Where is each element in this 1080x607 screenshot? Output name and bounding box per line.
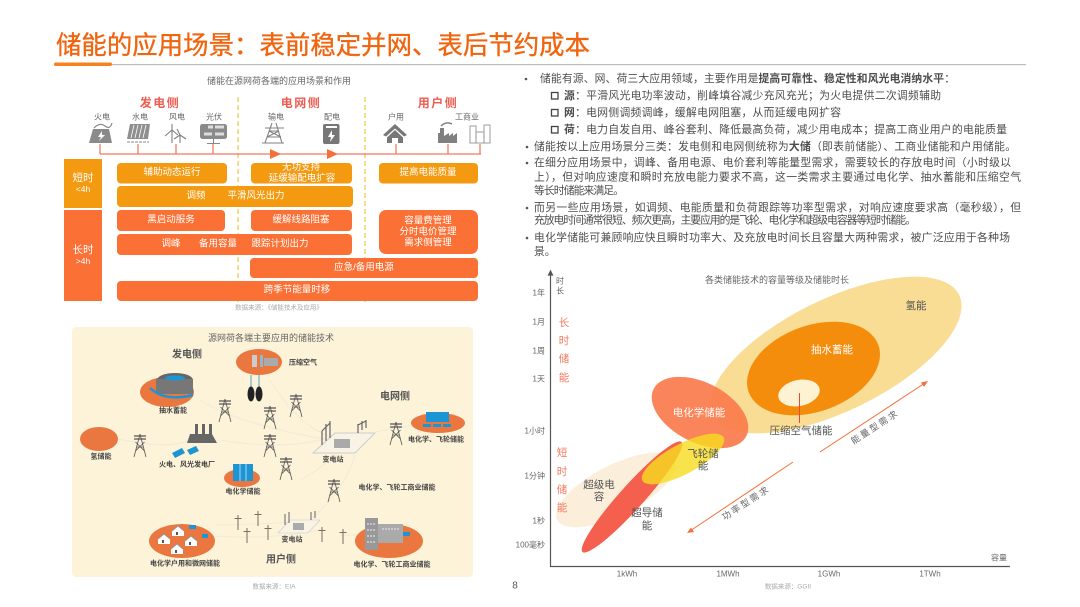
industrial label: 电化学、飞轮工商业储能 <box>358 482 436 492</box>
long duration label: 储 <box>559 352 570 365</box>
chart heading: 各类储能技术的容量等级及储能时长 <box>705 274 849 285</box>
icon: thermal power <box>89 123 112 143</box>
long duration label <box>559 317 570 384</box>
grid-side storage: 电化学、飞轮储能 <box>408 434 464 444</box>
side headings: 电网侧 <box>380 390 410 402</box>
grid-side storage <box>408 412 465 444</box>
ellipse labels <box>583 406 726 532</box>
distribution poles <box>234 511 346 544</box>
text block: key points: 充放电时间通常很短、频次更高，主要应用的是飞轮、电化学和超级电容器等短时储能。 <box>534 212 916 226</box>
short duration label: 能 <box>557 501 568 514</box>
electrochemical storage: 电化学储能 <box>226 486 260 496</box>
ellipse: hydrogen <box>688 245 984 465</box>
ellipse: compressed air <box>770 376 833 437</box>
text block: key points: 荷：电力自发自用、峰谷套利、降低最高负荷，减少用电成本；提高工商业用户的电能质量 <box>564 122 1007 136</box>
arrow: power demand <box>687 462 793 533</box>
y axis labels: 1月 <box>533 318 545 326</box>
arrow: energy demand: 能量型需求 <box>849 407 901 446</box>
ellipse labels: 容 <box>594 490 605 503</box>
residential storage <box>149 524 220 568</box>
x axis labels: 1kWh <box>617 570 637 578</box>
side headings: 用户侧 <box>266 552 296 566</box>
faint grid wires <box>118 380 420 537</box>
chart: capacity vs duration <box>516 245 1010 590</box>
substation <box>313 420 375 464</box>
short duration bar text: 无功支持 <box>282 161 320 173</box>
icon labels: 工商业 <box>455 112 479 122</box>
text block: key points: 而另一些应用场景，如调频、电能质量和负荷跟踪等功率型需求，对响应速度要求高（毫秒级），但 <box>534 200 1021 214</box>
y axis title: 时 <box>556 276 564 286</box>
icon: distribution box <box>323 124 340 144</box>
row label: short duration: <4h <box>76 184 90 194</box>
text block: key points: 等长时储能来满足。 <box>534 183 624 197</box>
y axis labels: 100毫秒 <box>516 540 545 550</box>
ellipse: compressed air: 压缩空气储能 <box>770 424 833 437</box>
user substation: 变电站 <box>282 534 302 544</box>
text block: key points: 电化学储能可兼顾响应快且瞬时功率大、及充放电时间长且容量大两种需求，被广泛应用于各种场 <box>534 230 1010 244</box>
short duration bars <box>117 163 478 207</box>
ellipse: pumped hydro: 抽水蓄能 <box>811 343 853 356</box>
commercial storage: 电化学、飞轮工商业储能 <box>354 560 430 568</box>
sub-bullet squares <box>552 92 558 133</box>
icon: commercial buildings <box>470 125 490 143</box>
long duration bar text: 缓解线路阻塞 <box>272 214 330 226</box>
y axis labels: 1年 <box>533 288 545 298</box>
y axis title <box>556 276 564 296</box>
icon labels: 配电 <box>324 112 340 122</box>
ellipse labels: 能 <box>698 459 709 472</box>
matrix heading: 储能在源网荷各端的应用场景和作用 <box>207 75 351 86</box>
short duration label: 储 <box>557 483 568 496</box>
timeline axis with arrows <box>100 144 481 159</box>
icon labels <box>94 112 479 122</box>
ellipse: supercapacitor <box>546 438 686 542</box>
compressed air <box>236 349 317 402</box>
ellipse labels: 超导储 <box>631 506 663 519</box>
map source: 数据来源：EIA <box>253 582 296 590</box>
icon: transmission tower <box>262 123 284 143</box>
pumped hydro: 抽水蓄能 <box>159 406 187 414</box>
arrow: energy demand <box>820 381 928 452</box>
long duration bar text: 分时电价管理 <box>399 226 457 238</box>
icon: house <box>383 124 407 143</box>
side headings: 发电侧 <box>172 348 202 360</box>
substation: 变电站 <box>322 454 344 464</box>
hydrogen storage: 氢储能 <box>90 452 112 460</box>
long duration bar text: 需求侧管理 <box>404 236 452 248</box>
map background <box>72 327 473 577</box>
text block: key points: 景。 <box>534 245 556 258</box>
short duration label <box>557 446 568 514</box>
row label: long duration <box>64 210 102 301</box>
hydrogen storage <box>80 427 118 460</box>
matrix source: 数据来源：《储能技术及应用》 <box>235 302 323 312</box>
short duration bar text: 提高电能质量 <box>399 166 457 178</box>
ellipse labels: 超级电 <box>583 478 615 491</box>
icon labels: 火电 <box>94 112 110 122</box>
short duration label: 时 <box>557 466 568 478</box>
icon labels: 输电 <box>268 112 284 122</box>
axes <box>548 271 1010 566</box>
x axis labels: 1MWh <box>716 570 740 578</box>
panel: source-grid-load scenario matrix <box>64 75 490 312</box>
long duration bar text: 黑启动服务 <box>147 214 195 226</box>
short duration bar text <box>143 161 457 202</box>
arrow: power demand: 功率型需求 <box>720 483 772 522</box>
side headings <box>172 348 410 566</box>
icon labels: 光伏 <box>206 112 222 122</box>
row label: long duration: 长时 <box>72 244 94 256</box>
row label: short duration: 短时 <box>72 171 94 184</box>
text block: key points: 源：平滑风光电功率波动，削峰填谷减少充风充光；为火电提供二次调频辅助 <box>564 88 941 102</box>
long duration bar text <box>147 214 457 296</box>
column headings: 发电侧 <box>140 95 180 110</box>
icon: hydro power <box>127 124 150 142</box>
title rule <box>54 62 1026 66</box>
long duration label: 时 <box>559 335 570 347</box>
power plant: 火电、风光发电厂 <box>159 460 215 468</box>
long duration bar text: 跨季节能量时移 <box>264 284 331 296</box>
long duration bar text: 备用容量 <box>199 238 237 250</box>
y axis labels: 1秒 <box>533 516 545 526</box>
ellipse labels: 飞轮储 <box>687 447 719 460</box>
y axis labels: 1天 <box>533 374 545 384</box>
column divider lines <box>238 97 365 305</box>
short duration bar text: 延缓输配电扩容 <box>269 172 336 184</box>
page number: 8 <box>512 580 518 592</box>
x axis labels: 容量 <box>991 552 1007 562</box>
long duration bar text: 容量费管理 <box>404 214 452 226</box>
long duration bars <box>117 210 478 301</box>
ellipse: hydrogen: 氢能 <box>906 299 927 312</box>
ellipse labels: 电化学储能 <box>673 406 726 419</box>
short duration bar text: 辅助动态运行 <box>143 166 201 178</box>
panel: storage map <box>72 327 473 590</box>
short duration bar text: 调频 <box>186 190 206 202</box>
electrochemical storage <box>224 464 260 496</box>
commercial storage <box>354 518 430 568</box>
row label: long duration: >4h <box>76 256 90 266</box>
column headings <box>140 95 458 110</box>
text block: key points: 储能按以上应用场景分三类：发电侧和电网侧统称为大储（即表前储能）、工商业储能和户用储能。 <box>534 139 1016 153</box>
long duration bar text: 应急/备用电源 <box>334 261 394 273</box>
ellipse: flywheel <box>635 424 731 494</box>
y axis labels: 1小时 <box>525 426 545 436</box>
ellipse labels: 能 <box>642 519 653 532</box>
text block: key points: 上），但对响应速度和瞬时充放电能力要求不高，这一类需求主要通过电化学、抽水蓄能和压缩空气 <box>534 170 1021 184</box>
long duration bar text: 跟踪计划出力 <box>251 238 309 250</box>
title: 储能的应用场景：表前稳定并网、表后节约成本 <box>56 32 590 60</box>
text block: key points: 在细分应用场景中，调峰、备用电源、电价套利等能量型需求，需要较长的存放电时间（小时级以 <box>534 155 1011 169</box>
short duration bar text: 平滑风光出力 <box>227 190 285 202</box>
icon labels: 风电 <box>169 112 185 122</box>
ellipse: superconducting <box>574 434 690 560</box>
icon: wind power <box>165 124 186 143</box>
icon: solar panel <box>200 124 227 144</box>
y axis title: 长 <box>556 286 564 296</box>
user substation <box>278 511 320 544</box>
text block: key points <box>525 71 1021 258</box>
ellipse: pumped hydro <box>734 304 893 433</box>
y axis labels: 1周 <box>533 346 545 356</box>
pumped hydro <box>140 373 194 414</box>
power plant <box>159 424 217 468</box>
text block: key points: 网：电网侧调频调峰，缓解电网阻塞，从而延缓电网扩容 <box>564 105 841 119</box>
bullet markers <box>525 78 528 239</box>
residential storage: 电化学户用和微网储能 <box>150 558 220 568</box>
ellipse: electrochemical <box>640 362 760 463</box>
y axis labels <box>516 288 545 550</box>
icon: factory <box>438 123 457 143</box>
icon labels: 水电 <box>132 112 148 122</box>
x axis labels: 1GWh <box>818 570 840 578</box>
bullet paragraphs: 储能有源、网、荷三大应用领域，主要作用是提高可靠性、稳定性和风光电消纳水平： <box>540 71 955 85</box>
column headings: 用户侧 <box>418 95 458 110</box>
x axis labels: 1TWh <box>919 570 941 578</box>
long duration label: 长 <box>559 317 570 329</box>
chart source: 数据来源：GGII <box>765 582 811 590</box>
long duration bar text: 调峰 <box>161 238 181 250</box>
short duration label: 短 <box>557 446 568 459</box>
long duration label: 能 <box>559 371 570 384</box>
y axis labels: 1分钟 <box>525 470 545 480</box>
transmission towers <box>134 394 402 502</box>
icon labels: 户用 <box>388 112 404 122</box>
column headings: 电网侧 <box>281 96 321 110</box>
compressed air: 压缩空气 <box>289 358 317 366</box>
x axis labels <box>617 552 1007 578</box>
row label: short duration <box>64 159 102 208</box>
map heading: 源网荷各端主要应用的储能技术 <box>208 332 334 343</box>
